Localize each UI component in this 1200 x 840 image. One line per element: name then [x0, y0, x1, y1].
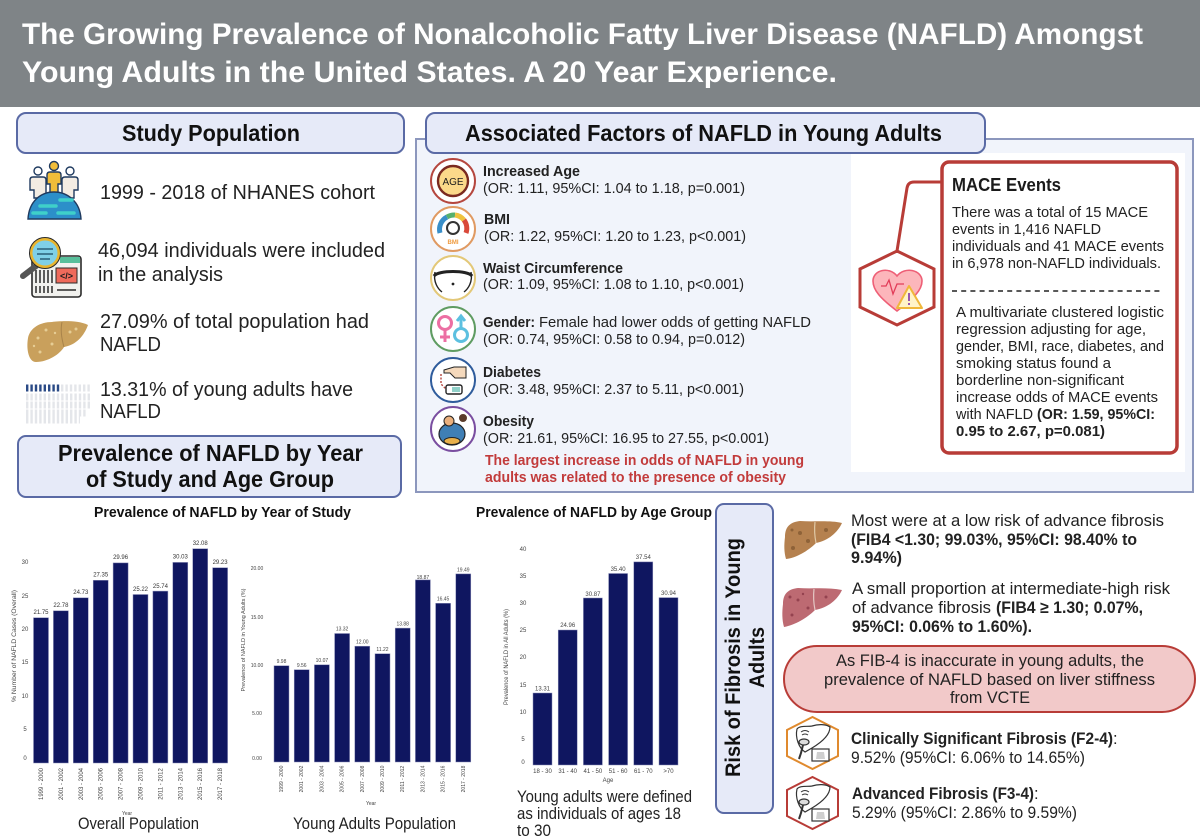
icon: obesity	[431, 407, 475, 451]
heading: study population	[17, 113, 404, 153]
bar chart: young adults population: 2017 - 2018	[461, 765, 467, 792]
bar chart: young adults population: 19.49	[457, 568, 470, 574]
factor: increased age	[483, 163, 745, 197]
bar chart: age group: 25	[520, 628, 527, 634]
bar chart: age group: Age	[603, 778, 614, 784]
text: individuals: in the analysis	[98, 264, 223, 286]
bar chart: overall population: 20	[22, 627, 29, 633]
bar chart: age group: 35.40	[611, 567, 626, 573]
caption: overall population: Overall Population	[78, 815, 199, 833]
factor: waist	[483, 260, 744, 293]
text: event totals	[952, 204, 1164, 272]
icon: data magnifier	[23, 238, 81, 297]
callout: fib-4 inaccurate	[784, 646, 1195, 712]
factor: gender: Gender:	[483, 314, 535, 331]
bar chart: age group: 61 - 70	[634, 769, 653, 775]
bar chart: overall population: 2005 - 2006	[99, 767, 105, 800]
text: young adult definition: to 30	[517, 822, 551, 840]
text: regression result: smoking status found a	[956, 355, 1112, 372]
bar chart: young adults population: 16.45	[437, 596, 450, 602]
text: individuals: 46,094 individuals were included	[98, 240, 385, 262]
bar chart: young adults population: 10.07	[316, 658, 328, 664]
factor: gender: Female had lower odds of getting NAFLD	[539, 314, 811, 331]
icon: low risk liver	[784, 521, 842, 559]
bar chart: overall population: 2001 - 2002	[59, 767, 65, 800]
text: clinically significant fibrosis	[851, 730, 1118, 767]
bar chart: age group: 24.96	[560, 623, 576, 629]
text: regression result: A multivariate clustered logistic	[956, 304, 1164, 321]
factor: increased age: (OR: 1.11, 95%CI: 1.04 to 1.18, p=0.001)	[483, 180, 745, 197]
factor: gender	[483, 314, 811, 348]
factor: obesity: Obesity	[483, 413, 535, 430]
bar chart: young adults population: Year	[366, 801, 376, 807]
heading: risk of fibrosis: Adults	[746, 627, 769, 688]
bar chart: young adults population: 10.00	[251, 663, 263, 669]
bar chart: young adults population: 2001 - 2002	[299, 765, 305, 792]
factor: diabetes: Diabetes	[483, 364, 541, 381]
bar chart: overall population: 32.08	[193, 541, 208, 547]
panel: associated factors	[416, 139, 1193, 492]
bar chart: overall population: 25.22	[133, 587, 149, 593]
bar chart: young adults population: 15.00	[251, 615, 263, 621]
bar chart: young adults population: 9.98	[277, 659, 287, 665]
bar chart: young adults population: Prevalence of NAFLD in Young Adults (%)	[241, 588, 247, 692]
text: regression result	[955, 304, 1164, 440]
factor: diabetes: (OR: 3.48, 95%CI: 2.37 to 5.11, p<0.001)	[483, 381, 744, 398]
text: individuals	[98, 240, 385, 286]
text: intermediate-high risk	[852, 580, 1171, 636]
bar chart: overall population: 0	[23, 756, 27, 762]
bar chart: young adults population: 20.00	[251, 566, 263, 572]
bar chart: young adults population: 13.32	[336, 626, 349, 632]
text: regression result: regression adjusting for age,	[956, 321, 1146, 338]
bar chart: age group: 10	[520, 710, 527, 716]
bar chart: overall population: 29.23	[213, 560, 228, 566]
text: event totals: individuals and 41 MACE events	[952, 238, 1164, 255]
heading: chart year of study: Prevalence of NAFLD by Year of Study	[94, 505, 351, 521]
text: total population: NAFLD	[100, 334, 161, 356]
bar chart: overall population: 2007 - 2008	[119, 767, 125, 800]
bar chart: young adults population: 0.00	[252, 756, 262, 762]
icon: people on globe	[28, 162, 81, 219]
icon: bmi gauge: BMI	[448, 240, 459, 246]
bar chart: age group: 31 - 40	[558, 769, 578, 775]
text: advanced fibrosis: :	[1034, 785, 1039, 803]
bar chart: overall population: 2003 - 2004	[79, 767, 85, 800]
bar chart: young adults population: 2003 - 2004	[319, 765, 325, 792]
bar chart: overall population: 21.75	[33, 610, 49, 616]
factor: obesity	[483, 413, 769, 447]
bar chart: overall population: 5	[23, 727, 27, 733]
factor: increased age: Increased Age	[483, 163, 580, 180]
heading: risk of fibrosis: Risk of Fibrosis in Young	[722, 538, 745, 777]
title: The Growing Prevalence of Nonalcoholic Fatty Liver Disease (NAFLD) Amongst	[22, 18, 1143, 51]
bar chart: overall population: 2009 - 2010	[138, 767, 144, 800]
bar chart: age group: 18 - 30	[533, 769, 552, 775]
text: event totals: in 6,978 non-NAFLD individuals.	[952, 255, 1161, 272]
caption: young adults population: Young Adults Population	[293, 815, 456, 833]
heading: chart age group: Prevalence of NAFLD by Age Group	[476, 505, 712, 521]
text: low risk	[851, 512, 1164, 567]
bar chart: overall population: 10	[22, 694, 29, 700]
text: young adults: 13.31% of young adults have	[100, 379, 353, 401]
factor: gender: (OR: 0.74, 95%CI: 0.58 to 0.94, p=0.012)	[483, 331, 745, 348]
text: event totals: events in 1,416 NAFLD	[952, 221, 1101, 238]
bar chart: age group: Prevalence of NAFLD in All Adults (%)	[504, 609, 510, 705]
text: clinically significant fibrosis: Clinically Significant Fibrosis (F2-4)	[851, 730, 1113, 748]
bar chart: age group: 30.87	[585, 592, 601, 598]
bar chart: overall population: Year	[122, 811, 132, 817]
text: young adult definition	[517, 788, 692, 840]
text: clinically significant fibrosis: 9.52% (95%CI: 6.06% to 14.65%)	[851, 749, 1085, 767]
icon: gender	[431, 307, 475, 351]
bar chart: young adults population: 2015 - 2016	[441, 765, 447, 792]
text: low risk: 9.94%)	[851, 549, 902, 567]
bar chart: age group: 40	[520, 547, 527, 553]
factor: obesity: (OR: 21.61, 95%CI: 16.95 to 27.55, p<0.001)	[483, 430, 769, 447]
text: cohort: 1999 - 2018 of NHANES cohort	[100, 182, 375, 204]
text: young adults: NAFLD	[100, 401, 161, 423]
icon: data magnifier: </>	[60, 271, 73, 281]
title	[22, 18, 1143, 89]
text: advanced fibrosis: 5.29% (95%CI: 2.86% to 9.59%)	[852, 804, 1077, 822]
icon: age: AGE	[442, 177, 464, 188]
text: advanced fibrosis	[852, 785, 1077, 822]
factor: diabetes	[483, 364, 744, 398]
bar chart: young adults population: 2009 - 2010	[380, 765, 386, 792]
bar chart: young adults population: 12.00	[356, 640, 369, 646]
callout: fib-4 inaccurate: from VCTE	[950, 689, 1030, 707]
bar chart: young adults population: 1999 - 2000	[279, 765, 285, 792]
text: total population	[100, 311, 369, 356]
bar chart: young adults population: 2013 - 2014	[420, 765, 426, 792]
factor: bmi: (OR: 1.22, 95%CI: 1.20 to 1.23, p<0.001)	[484, 228, 746, 245]
text: young adult definition: as individuals of ages 18	[517, 805, 681, 823]
heading: associated factors: Associated Factors of NAFLD in Young Adults	[465, 120, 942, 146]
bar chart: overall population: 2017 - 2018	[218, 767, 224, 800]
icon: diabetes	[431, 358, 475, 402]
bar chart: young adults population: 18.87	[417, 575, 429, 581]
text: regression result: gender, BMI, race, diabetes, and	[956, 338, 1164, 355]
heading: associated factors	[426, 113, 985, 153]
icon: f2-4 ultrasound	[787, 717, 838, 769]
bar chart: young adults population: 11.22	[376, 647, 389, 653]
bar chart: young adults population: 5.00	[252, 711, 262, 717]
text: intermediate-high risk: 95%CI: 0.06% to 1.60%).	[852, 618, 1032, 636]
bar chart: age group: 30	[520, 601, 527, 607]
icon: heart warning with connector	[860, 182, 942, 325]
callout: fib-4 inaccurate: As FIB-4 is inaccurate in young adults, the	[836, 652, 1144, 670]
callout: largest increase: The largest increase in odds of NAFLD in young	[485, 453, 804, 469]
bar chart: young adults population: 2005 - 2006	[340, 765, 346, 792]
icon: bmi gauge	[431, 207, 475, 251]
text: regression result: with NAFLD	[955, 406, 1033, 423]
bar chart: overall population: 25.74	[153, 584, 169, 590]
factor: bmi: BMI	[484, 211, 510, 228]
text: advanced fibrosis: Advanced Fibrosis (F3-4)	[852, 785, 1034, 803]
factor: waist: (OR: 1.09, 95%CI: 1.08 to 1.10, p<0.001)	[483, 276, 744, 293]
bar chart: age group: 35	[520, 574, 527, 580]
bar chart: age group: 30.94	[661, 591, 677, 597]
text: intermediate-high risk: of advance fibrosis	[852, 599, 991, 617]
text: regression result: increase odds of MACE events	[956, 389, 1158, 406]
bar chart: overall population: 30	[22, 560, 29, 566]
text: intermediate-high risk: A small proportion at intermediate-high risk	[852, 580, 1171, 598]
text: total population: 27.09% of total population had	[100, 311, 369, 333]
icon: waist	[431, 256, 475, 300]
icon: population grid	[26, 388, 90, 420]
bar chart: age group: 20	[520, 655, 527, 661]
bar chart: overall population: 30.03	[173, 554, 188, 560]
bar chart: age group: 5	[521, 737, 525, 743]
heading: prevalence by year and age: of Study and Age Group	[86, 466, 334, 492]
bar chart: overall population: 1999 - 2000	[39, 767, 45, 800]
header banner	[0, 0, 1200, 107]
text: regression result: borderline non-significant	[956, 372, 1125, 389]
bar chart: overall population: 24.73	[73, 590, 89, 596]
heading: prevalence by year and age: Prevalence of NAFLD by Year	[58, 440, 363, 466]
icon: fatty liver	[27, 321, 88, 362]
bar chart: overall population: 29.96	[113, 555, 129, 561]
bar chart: young adults population	[241, 566, 471, 807]
bar chart: overall population: 2013 - 2014	[178, 767, 184, 800]
text: event totals: There was a total of 15 MACE	[952, 204, 1148, 221]
callout: largest increase	[485, 453, 804, 486]
bar chart: young adults population: 9.56	[297, 663, 307, 669]
factor: waist: Waist Circumference	[483, 260, 623, 277]
icon: age	[431, 159, 475, 203]
bar chart: overall population: 15	[22, 660, 29, 666]
heading: risk of fibrosis	[716, 504, 773, 813]
bar chart: young adults population: 13.88	[396, 622, 409, 628]
callout: largest increase: adults was related to the presence of obesity	[485, 470, 786, 486]
text: low risk: Most were at a low risk of advance fibrosis	[851, 512, 1164, 530]
text: young adult definition: Young adults were defined	[517, 788, 692, 806]
icon: high risk liver	[782, 588, 842, 627]
bar chart: age group: 37.54	[636, 555, 651, 561]
bar chart: overall population: 2011 - 2012	[158, 768, 164, 800]
heading: mace events: MACE Events	[952, 175, 1061, 195]
bar chart: age group: 0	[521, 760, 525, 766]
text: low risk: (FIB4 <1.30; 99.03%, 95%CI: 98.40% to	[851, 531, 1137, 549]
callout: fib-4 inaccurate: prevalence of NAFLD based on liver stiffness	[824, 671, 1155, 689]
title: Young Adults in the United States. A 20 Year Experience.	[22, 56, 837, 89]
bar chart: age group	[504, 547, 678, 784]
text: clinically significant fibrosis: :	[1113, 730, 1118, 748]
bar chart: overall population	[12, 541, 228, 817]
text: regression result: (OR: 1.59, 95%CI:	[1037, 406, 1155, 423]
bar chart: young adults population: 2011 - 2012	[400, 766, 406, 792]
bar chart: overall population: 27.35	[93, 572, 109, 578]
text: regression result: 0.95 to 2.67, p=0.081)	[956, 423, 1105, 440]
factor: bmi	[484, 211, 746, 245]
bar chart: overall population: 2015 - 2016	[198, 767, 204, 800]
bar chart: overall population: 22.78	[53, 603, 69, 609]
icon: f3-4 ultrasound	[787, 777, 838, 829]
bar chart: age group: >70	[663, 769, 674, 775]
bar chart: age group: 51 - 60	[609, 769, 628, 775]
text: young adults	[100, 379, 353, 423]
bar chart: young adults population: 2007 - 2008	[360, 765, 366, 792]
bar chart: age group: 15	[520, 683, 527, 689]
bar chart: overall population: % Number of NAFLD Cases (Overall)	[12, 590, 18, 702]
panel: mace events	[942, 162, 1177, 453]
heading: study population: Study Population	[122, 120, 300, 146]
bar chart: overall population: 25	[22, 594, 29, 600]
bar chart: age group: 41 - 50	[584, 769, 603, 775]
heading: prevalence by year and age	[18, 436, 401, 497]
text: intermediate-high risk: (FIB4 ≥ 1.30; 0.07%,	[996, 599, 1143, 617]
bar chart: age group: 13.31	[535, 686, 551, 692]
